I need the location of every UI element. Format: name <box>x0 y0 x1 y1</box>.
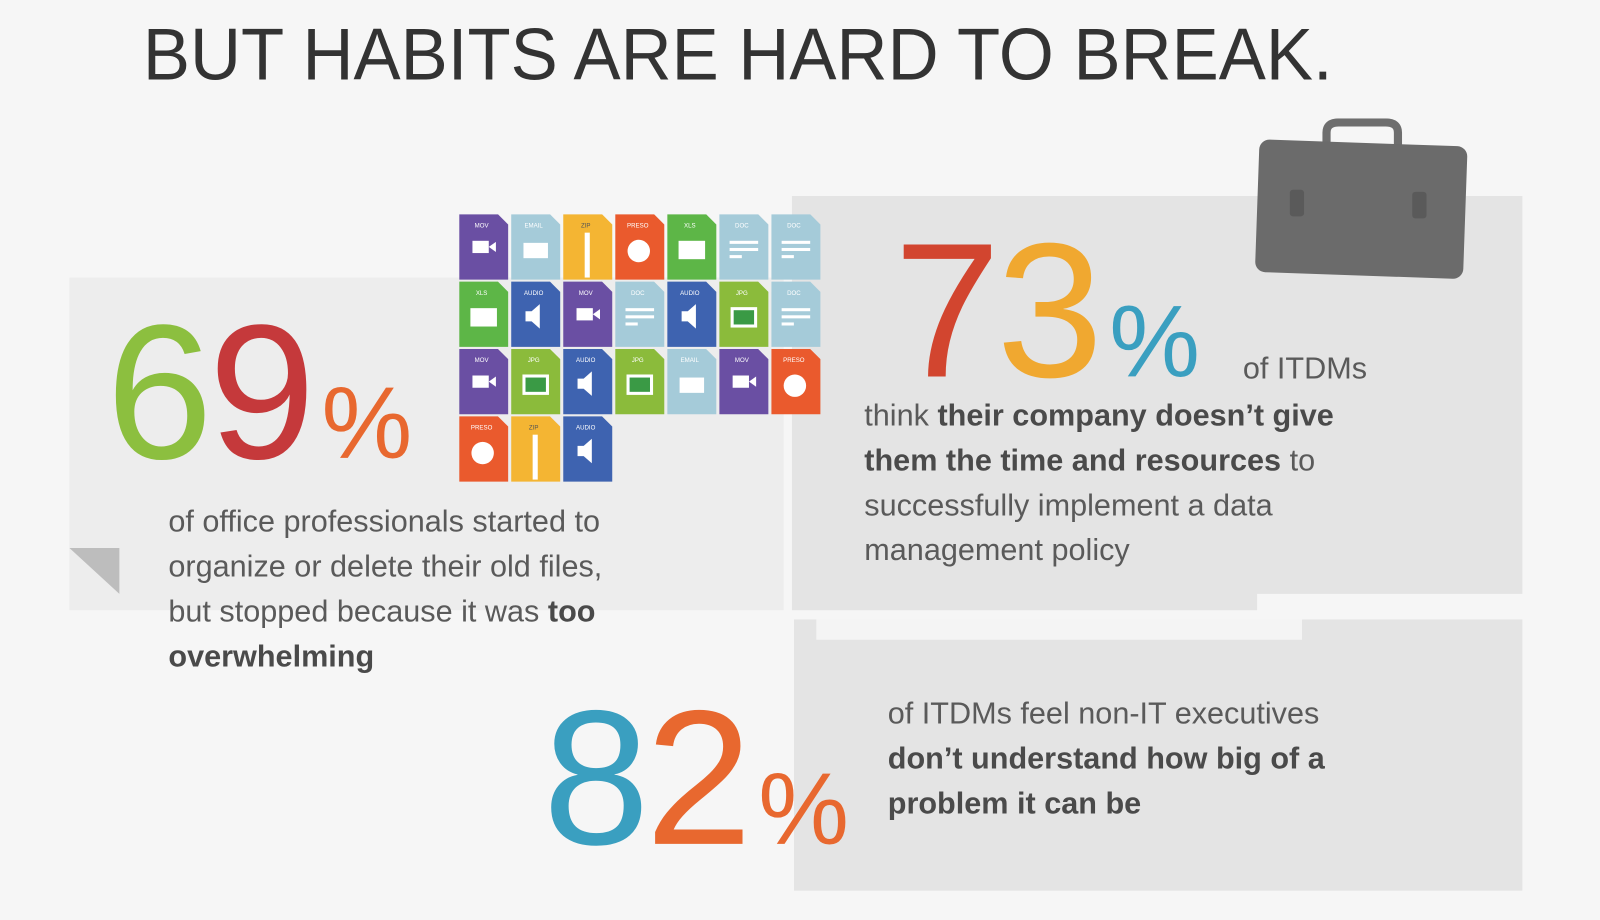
chart: file icons grid: PRESO <box>471 425 493 432</box>
panel: 73% background <box>792 196 1522 610</box>
chart: file icons grid: AUDIO <box>576 357 596 364</box>
text: 82% description: of ITDMs feel non-IT executives don’t understand how big of a problem it can be <box>888 697 1325 820</box>
chart: file icons grid: DOC <box>735 223 749 230</box>
text: of ITDMs: of ITDMs <box>1243 352 1367 386</box>
chart: file icons grid: XLS <box>684 223 696 230</box>
chart: file icons grid: MOV <box>475 223 490 230</box>
chart: file icons grid: JPG <box>632 357 644 364</box>
chart: file icons grid: JPG <box>736 290 748 297</box>
panel: left background <box>69 278 784 610</box>
chart: file icons grid: AUDIO <box>524 290 544 297</box>
chart: file icons grid: MOV <box>735 357 750 364</box>
chart: file icons grid: AUDIO <box>576 425 596 432</box>
chart: file icons grid: PRESO <box>783 357 805 364</box>
stat: 82%: 82% <box>543 670 849 885</box>
chart: file icons grid: DOC <box>787 290 801 297</box>
chart: file icons grid: AUDIO <box>680 290 700 297</box>
chart: file icons grid: ZIP <box>529 425 538 432</box>
chart: file icons grid: ZIP <box>581 223 590 230</box>
chart: file icons grid: MOV <box>475 357 490 364</box>
chart: file icons grid: DOC <box>631 290 645 297</box>
chart: file icons grid: EMAIL <box>524 223 543 230</box>
icon: folded corner <box>70 548 120 594</box>
text: 73% description: think their company doesn’t give them the time and resources to successfully implement a data management policy <box>864 399 1334 567</box>
chart: file icons grid: MOV <box>579 290 594 297</box>
icon: briefcase <box>1255 118 1468 279</box>
stat: 69%: 69% <box>106 285 412 499</box>
title: BUT HABITS ARE HARD TO BREAK. <box>143 13 1333 96</box>
chart: file icons grid: JPG <box>528 357 540 364</box>
text: 69% description: of office professionals started to organize or delete their old files, but stopped because it was too overwhelming <box>168 505 602 673</box>
chart: file icons grid <box>459 214 820 482</box>
chart: file icons grid: XLS <box>476 290 487 297</box>
chart: file icons grid: PRESO <box>627 223 649 230</box>
chart: file icons grid: DOC <box>787 223 801 230</box>
chart: file icons grid: EMAIL <box>681 357 700 364</box>
stat: 73%: 73% <box>894 203 1200 417</box>
panel: 82% background <box>794 620 1522 890</box>
